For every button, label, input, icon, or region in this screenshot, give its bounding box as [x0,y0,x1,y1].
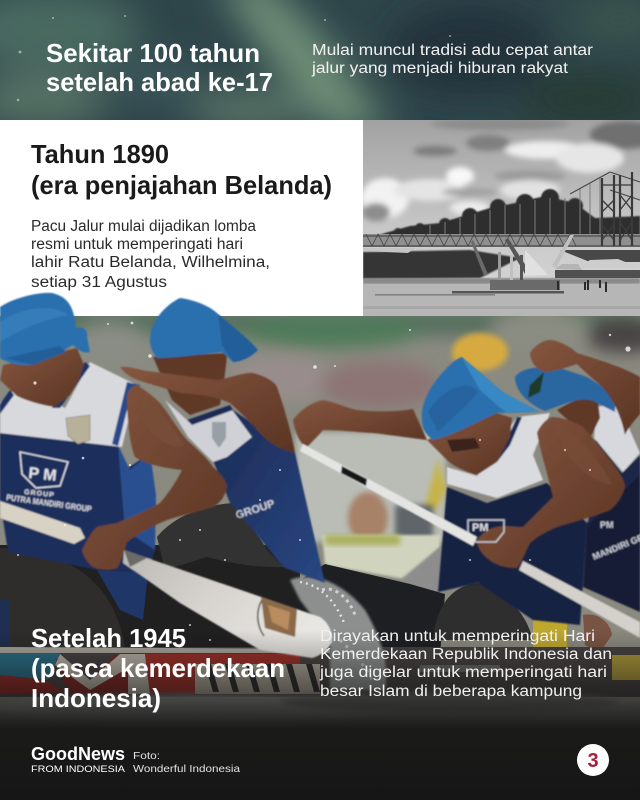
text block: lomba resmi: Pacu Jalur mulai dijadikan lomba [31,218,256,235]
tree line [378,188,640,234]
rower 3 [293,357,625,625]
page number badge [577,744,609,776]
heading: setelah 1945 [31,623,285,713]
rower 2 [120,298,325,583]
text block: lomba resmi [31,218,270,291]
heading: setelah 1945: Indonesia) [31,683,161,713]
photo: rowers background [0,316,640,740]
blue cloth of rower 1 [97,570,148,620]
heading: setelah 1945: Setelah 1945 [31,623,186,653]
splash [290,577,386,690]
text block: lomba resmi: lahir Ratu Belanda, Wilhelmina, [31,254,270,271]
bandana of rower 1 [0,293,90,365]
jersey badge [66,415,90,444]
photo credit [133,750,240,775]
yellow helmet [452,333,508,371]
boot and knee right [433,583,533,640]
heading: tahun 1890: Tahun 1890 [31,139,169,169]
text block: tradisi adu cepat: jalur yang menjadi hiburan rakyat [311,60,569,77]
boat stripe [0,647,640,697]
bandana of rower 3 [422,357,540,440]
forest bank [363,250,520,279]
jersey logo [6,452,93,514]
photo: black and white bridge and boats [361,118,640,316]
panel: white 1890 background [0,120,363,316]
rower 4 far right: PM [600,520,614,530]
tents [588,259,626,262]
text block: hari kemerdekaan [319,628,612,700]
rower 4 far right [515,340,640,612]
text block: tradisi adu cepat: Mulai muncul tradisi adu cepat antar [312,42,593,59]
left arm of rower 3 [293,400,427,447]
boat with sails [452,235,574,294]
rowers group [0,293,640,658]
hull left [0,545,300,650]
paddle of rower 1 [0,501,332,658]
photo credit: Wonderful Indonesia [133,763,240,775]
clouds [361,118,640,221]
section heading: sekitar 100 tahun: Sekitar 100 tahun [46,38,260,68]
rower 2: GROUP [234,498,276,522]
heading: tahun 1890 [31,139,332,200]
text block: hari kemerdekaan: Dirayakan untuk memperingati Hari [320,628,595,645]
rower 1 arm [82,385,227,570]
jersey logo: GROUP [24,489,55,499]
yellow shirt [424,458,446,510]
paddle crest [258,597,297,637]
arm of rower 2 [120,367,295,453]
top section background photo [0,0,640,130]
paddle of rower 3 [300,444,640,638]
logo: goodnews from indonesia: GoodNews [31,744,125,764]
text block: hari kemerdekaan: juga digelar untuk memperingati hari [319,664,607,681]
green white boat [322,535,440,580]
leg of rower 2 [157,503,283,570]
text block: lomba resmi: setiap 31 Agustus [31,274,167,291]
jersey logo: PUTRA MANDIRI GROUP [6,492,93,514]
jersey logo: P M [28,465,57,485]
right arm of rower 3 [477,417,625,568]
photo credit: Foto: [133,750,160,762]
bridge deck and cables [430,172,640,240]
pale backdrop [296,432,446,542]
rower 3: PM [472,522,488,534]
heading: setelah 1945: (pasca kemerdekaan [31,653,285,683]
text block: hari kemerdekaan: besar Islam di beberapa kampung [320,683,582,700]
page number badge: 3 [587,750,599,772]
logo: goodnews from indonesia [31,744,125,774]
text block: tradisi adu cepat [311,42,593,77]
bandana of rower 2 [150,298,258,362]
section heading: sekitar 100 tahun [46,38,273,97]
blurred figure [348,492,388,544]
shore people [558,280,606,292]
water [363,284,640,316]
logo: goodnews from indonesia: FROM INDONESIA [31,764,125,774]
water droplets [17,322,631,641]
bottom dark gradient [0,630,640,800]
section heading: sekitar 100 tahun: setelah abad ke-17 [46,67,273,97]
heading: tahun 1890: (era penjajahan Belanda) [31,170,332,200]
text block: hari kemerdekaan: Kemerdekaan Republik Indonesia dan [320,646,612,663]
text block: lomba resmi: resmi untuk memperingati hari [31,236,243,253]
rower 1 [0,293,227,572]
dark hull [300,564,445,655]
water spray [52,692,308,704]
bridge tower [602,172,632,246]
